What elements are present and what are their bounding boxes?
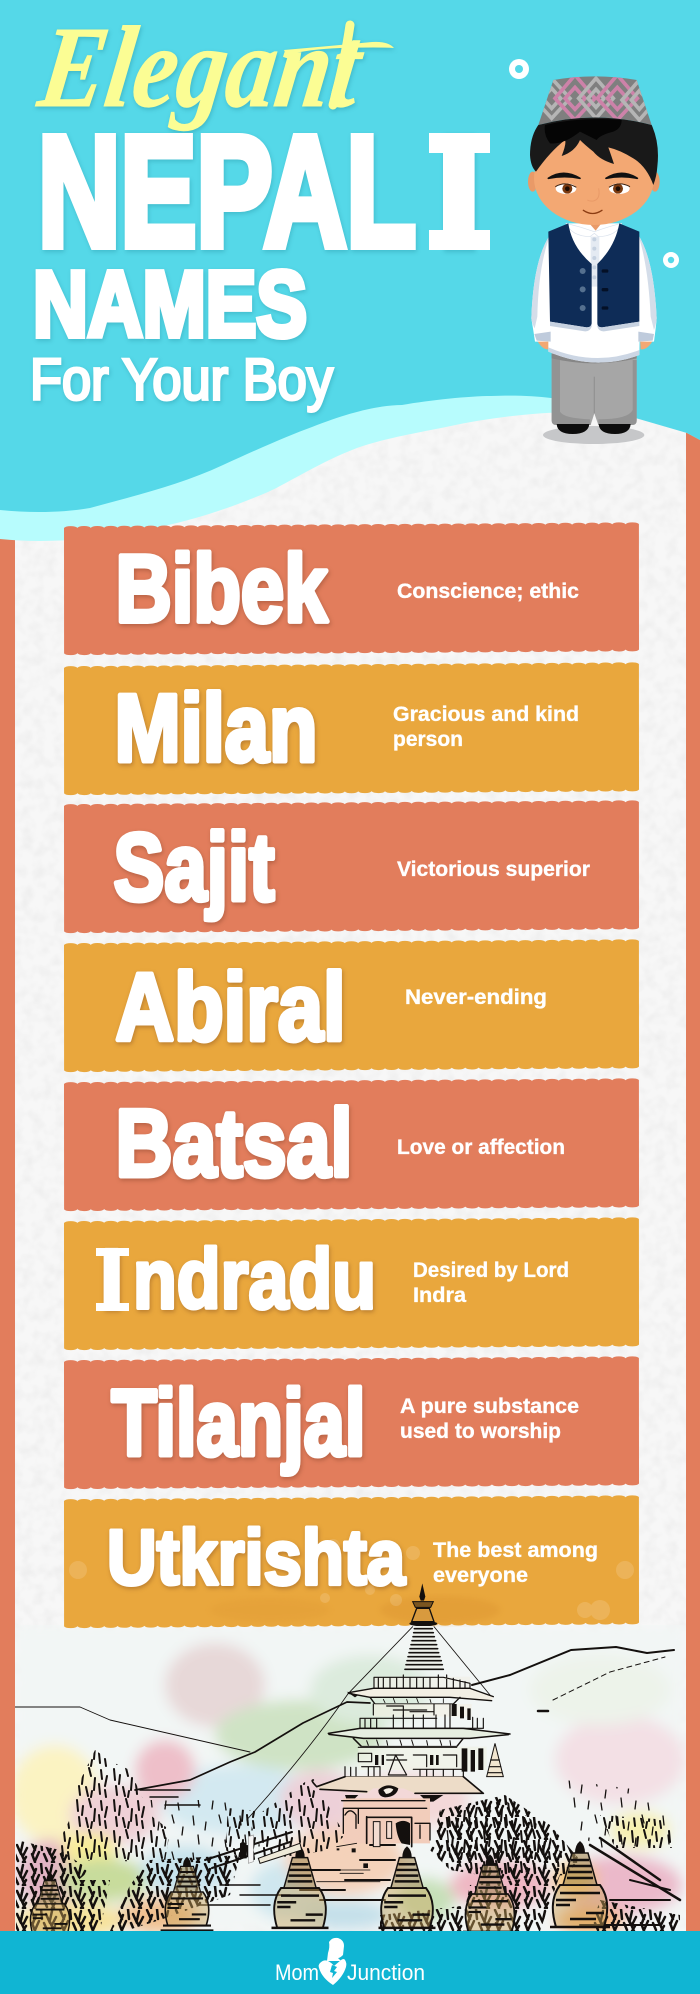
band 6: Indradu xyxy=(64,1217,639,1350)
third roof xyxy=(312,1777,483,1802)
band 3: Sajit xyxy=(64,800,639,933)
meaning: Gracious and kind xyxy=(393,703,579,726)
header wave: pale cyan ribbon xyxy=(0,0,700,541)
second level xyxy=(360,1704,483,1728)
trousers xyxy=(552,353,637,425)
band 7: Tilanjal xyxy=(64,1356,639,1489)
title: NEPALI: NEPAL xyxy=(38,104,416,280)
title: NEPALI: I xyxy=(437,104,481,280)
meaning: Victorious superior xyxy=(397,858,590,881)
band 1: Bibek xyxy=(64,522,639,655)
band 4: Abiral xyxy=(64,939,639,1072)
meaning: used to worship xyxy=(400,1420,561,1443)
paths and stairs xyxy=(200,1832,680,1925)
name: Sajit xyxy=(114,814,274,921)
decorative ring: right xyxy=(663,252,679,268)
decorative ring: top xyxy=(509,59,529,79)
hands xyxy=(536,338,654,349)
neck and head xyxy=(528,132,660,231)
name: Batsal xyxy=(116,1090,352,1197)
title block xyxy=(30,4,490,412)
name: Utkrishta xyxy=(107,1513,406,1601)
band speckles xyxy=(69,1539,634,1624)
title: For Your Boy: For Your Boy xyxy=(30,348,333,412)
title: Elegant: Elegant xyxy=(32,4,371,132)
shirt xyxy=(531,223,657,363)
spire xyxy=(405,1583,443,1669)
meaning: Desired by Lord xyxy=(413,1259,569,1282)
title: NAMES: NAMES xyxy=(33,252,307,356)
second roof xyxy=(328,1728,510,1747)
logo wordmark: Junction xyxy=(347,1960,425,1985)
watercolor washes xyxy=(10,1625,686,1938)
logo icon: mother and baby heart xyxy=(319,1938,346,1985)
band 2: Milan xyxy=(64,662,639,795)
watercolor temple illustration xyxy=(10,1625,686,1943)
meaning: Love or affection xyxy=(397,1136,565,1159)
logo wordmark: Mom xyxy=(275,1960,319,1985)
header wave: cyan background xyxy=(0,0,700,512)
meaning: A pure substance xyxy=(400,1395,579,1418)
name: Tilanjal xyxy=(112,1370,366,1475)
hair xyxy=(530,117,658,185)
meaning: Conscience; ethic xyxy=(397,580,579,603)
meaning: The best among xyxy=(433,1539,598,1562)
ropes xyxy=(247,1627,490,1820)
illustration: pagoda temple xyxy=(240,1583,510,1882)
name: ndradu xyxy=(133,1232,376,1326)
meaning: Indra xyxy=(413,1284,466,1307)
face xyxy=(548,173,637,213)
name: Abiral xyxy=(116,954,346,1061)
shoes xyxy=(557,424,631,434)
gate and base xyxy=(240,1798,430,1882)
name: Milan xyxy=(114,675,318,782)
meaning: everyone xyxy=(433,1564,528,1587)
name: Bibek xyxy=(116,536,328,642)
mountain lines xyxy=(15,1647,674,1805)
stupas xyxy=(30,1841,610,1931)
third level xyxy=(345,1743,503,1777)
left orange border xyxy=(0,535,15,1935)
meaning: Never-ending xyxy=(405,986,547,1009)
meaning: person xyxy=(393,728,463,751)
footer bar xyxy=(0,1931,700,1994)
band 5: Batsal xyxy=(64,1078,639,1211)
band 8: Utkrishta xyxy=(64,1495,639,1628)
logo: MomJunction xyxy=(275,1938,425,1985)
trees and scrub xyxy=(16,1750,680,1931)
vest xyxy=(548,223,639,331)
hat xyxy=(533,75,657,125)
name: I xyxy=(100,1232,123,1326)
upper balcony and roof xyxy=(347,1675,493,1704)
right orange border xyxy=(686,430,700,1935)
illustration: boy in Nepali dress xyxy=(528,75,660,444)
